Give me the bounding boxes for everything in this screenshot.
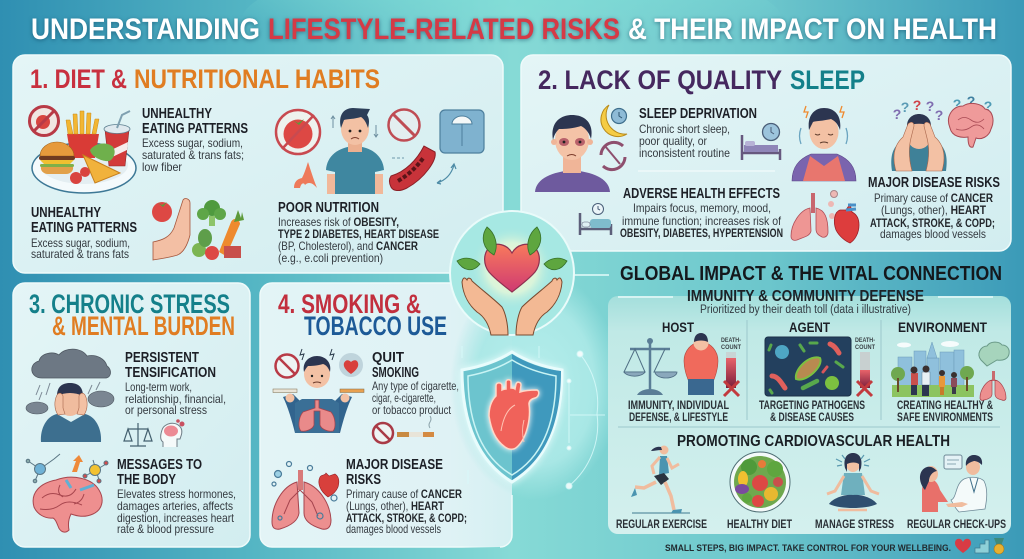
text: unhealthy eating patterns 1: Excess sugar, sodium, [142,136,243,150]
icon: city park [891,341,974,397]
panel: chronic stress and mental burden [13,283,250,547]
icon: person with questions [891,93,992,171]
text: quit smoking: cigar, e-cigarette, [372,391,436,405]
text: major disease risks 4 [346,457,467,536]
icon: crossed apple [276,110,320,154]
icon: person with questions: ? [935,107,943,123]
item: regular exercise [616,446,707,531]
text: poor nutrition: Increases risk of OBESITY, [278,215,399,229]
icon: lungs [980,371,1006,400]
heading: promoting cardiovascular health: PROMOTING CARDIOVASCULAR HEALTH [677,433,950,450]
text: sleep deprivation: poor quality, or [639,134,707,148]
heading: stress [29,289,235,341]
heading: stress: 3. CHRONIC STRESS [29,289,230,319]
icon: hand refusing vegetables [152,199,244,260]
text: major disease risks 4: RISKS [346,472,381,488]
footer tagline: SMALL STEPS, BIG IMPACT. TAKE CONTROL FOR YOUR WELLBEING. [665,543,951,554]
text: adverse health effects: immune function; increases risk of [622,214,782,228]
icon: tired person [326,108,384,194]
footer tagline [665,538,1004,554]
text: major disease risks 2: (Lungs, other), HEART [881,203,987,217]
icon: person under storm cloud [26,349,114,442]
text: poor nutrition [278,200,439,265]
icon: death count gauge agent: COUNT [855,344,875,351]
text: sleep deprivation [639,106,757,160]
text: poor nutrition: (e.g., e.coli prevention) [278,251,383,265]
icon: bed with clock [742,124,780,160]
column: host: HOST [662,319,694,335]
item: healthy diet [727,452,792,531]
icon: person with questions: ? [953,96,961,112]
text: environment caption: CREATING HEALTHY & [897,400,993,412]
text: messages to the body [117,457,236,536]
icon: flame [294,162,317,188]
item: healthy diet: HEALTHY DIET [727,519,792,531]
icon: death count gauge host: COUNT [721,344,741,351]
icon: doctor and patient [920,455,987,512]
icon: death count gauge agent: DEATH- [855,337,875,344]
text: major disease risks 2: damages blood vessels [880,227,986,241]
text: unhealthy eating patterns 2: Excess sugar, sodium, [31,236,130,250]
icon: lungs heart and bubbles [272,462,339,529]
title [31,13,997,46]
text: poor nutrition: (BP, Cholesterol), and CANCER [278,239,418,253]
text: messages to the body: rate & blood pressure [117,522,214,536]
icon: weighing scale [440,110,484,153]
text: unhealthy eating patterns 1 [142,106,248,174]
icon: crossed vessel [388,110,420,140]
icon: drowsy person in hoodie [792,106,856,181]
item: manage stress [815,453,894,531]
icon: person with questions: ? [893,106,901,122]
icon: fast food plate [30,106,136,193]
icon: no smoking [373,416,434,443]
decoration: circuit lines [462,346,605,489]
text: adverse health effects [620,186,783,240]
icon: death count gauge agent [855,337,875,396]
icon: moon and clock [601,105,627,137]
column: environment: ENVIRONMENT [898,319,987,335]
text: host caption: IMMUNITY, INDIVIDUAL [628,400,729,412]
icon: person with questions: ? [926,98,934,114]
icon: salad plate [730,452,790,512]
column: agent: AGENT [789,319,830,335]
icon: brain with lightning [33,455,102,532]
text: major disease risks 4: (Lungs, other), HEART [346,499,445,513]
icon: clogged artery [390,146,435,191]
icon: person with questions: ? [913,97,921,113]
icon: brain [948,103,993,147]
text: environment caption: SAFE ENVIRONMENTS [897,412,993,424]
text: sleep deprivation: SLEEP DEPRIVATION [639,106,757,122]
heading: sleep: SLEEP [790,65,865,95]
text: messages to the body: THE BODY [117,472,176,488]
text: environment caption [897,400,993,424]
icon: head with brain [161,419,184,447]
icon: heart shield [462,352,562,482]
item: regular check-ups [907,455,1006,531]
text: major disease risks 2 [868,175,1000,241]
icon: runner [631,446,690,513]
text: adverse health effects: Impairs focus, memory, mood, [633,201,771,215]
text: agent caption: & DISEASE CAUSES [770,412,854,424]
panel: global impact backdrop [608,296,1011,534]
icon: person with questions: ? [984,98,992,114]
icon: footer steps [975,540,989,553]
heading: sleep: 2. LACK OF QUALITY [538,65,782,95]
heading: smoking: 4. SMOKING & [278,289,421,319]
text: unhealthy eating patterns 1: low fiber [142,160,182,174]
text: major disease risks 2: Primary cause of CANCER [874,191,993,205]
item: manage stress: MANAGE STRESS [815,519,894,531]
text: major disease risks 4: Primary cause of CANCER [346,487,462,501]
heading: smoking [278,289,447,341]
text: poor nutrition: TYPE 2 DIABETES, HEART DISEASE [278,227,439,241]
text: adverse health effects: ADVERSE HEALTH EFFECTS [623,186,780,202]
icon: death count gauge host [721,337,741,396]
text: major disease risks 4: ATTACK, STROKE, & COPD; [346,511,467,525]
text: messages to the body: damages arteries, affects [117,499,233,513]
text: agent caption: TARGETING PATHOGENS [759,400,865,412]
text: persistent tensification: relationship, financial, [125,392,226,406]
panel: lack of quality sleep [521,55,1011,251]
text: unhealthy eating patterns 1: UNHEALTHY [142,106,212,122]
column: host [624,319,741,424]
icon: curved arrow [437,164,456,184]
icon: person with questions: ? [967,93,975,109]
text: immunity heading: IMMUNITY & COMMUNITY DEFENSE [687,288,924,305]
center glow over panel edge [450,270,620,500]
panel: diet and nutritional habits [13,55,503,273]
heading: diet: NUTRITIONAL HABITS [134,64,380,94]
text: agent caption [759,400,865,424]
text: persistent tensification: Long-term work, [125,380,192,394]
text: persistent tensification [125,350,226,417]
text: persistent tensification: PERSISTENT [125,350,199,366]
icon: footer heart [955,539,971,553]
title: UNDERSTANDING [31,13,260,46]
text: quit smoking: QUIT [372,350,404,366]
text: unhealthy eating patterns 1: saturated & trans fats; [142,148,244,162]
heading: smoking: TOBACCO USE [304,311,447,341]
text: host caption: DEFENSE, & LIFESTYLE [629,412,728,424]
icon: person holding cigarettes [273,349,364,433]
icon: smog cloud [979,342,1009,366]
heading: diet [30,64,380,94]
text: major disease risks 4: damages blood vessels [346,522,441,536]
text: persistent tensification: TENSIFICATION [125,365,216,381]
text: major disease risks 4: MAJOR DISEASE [346,457,443,473]
icon: person with questions: ? [901,99,909,115]
text: quit smoking [372,350,459,417]
text: sleep deprivation: inconsistent routine [639,146,730,160]
text: unhealthy eating patterns 2: UNHEALTHY [31,205,101,221]
text: unhealthy eating patterns 2: saturated & trans fats [31,247,129,261]
icon: disrupted cycle [601,142,625,170]
text: adverse health effects: OBESITY, DIABETES, HYPERTENSION [620,226,783,240]
icon: heart in hands [450,211,609,335]
icon: scales [124,423,152,446]
text: messages to the body: digestion, increases heart [117,511,235,525]
text: unhealthy eating patterns 1: EATING PATTERNS [142,121,248,137]
icon: death count gauge host: DEATH- [721,337,741,344]
text: messages to the body: MESSAGES TO [117,457,202,473]
icon: meditating person [827,453,879,510]
icon: molecules [26,454,108,483]
item: regular exercise: REGULAR EXERCISE [616,519,707,531]
text: poor nutrition: POOR NUTRITION [278,200,379,216]
icon: sleepy person [535,115,610,192]
column: agent [759,319,875,424]
text: unhealthy eating patterns 2 [31,205,137,261]
text: unhealthy eating patterns 2: EATING PATTERNS [31,220,137,236]
heading: stress: & MENTAL BURDEN [52,311,235,341]
text: quit smoking: or tobacco product [372,403,452,417]
panel: smoking and tobacco use [260,270,620,547]
text: sleep deprivation: Chronic short sleep, [639,122,730,136]
text: host caption [628,400,729,424]
icon: overweight person [684,333,718,395]
text: messages to the body: Elevates stress hormones, [117,487,236,501]
heading: diet: 1. DIET & [30,64,127,94]
icon: small bed [580,204,611,235]
text: persistent tensification: or personal stress [125,403,207,417]
dividers [618,320,1000,427]
title: LIFESTYLE-RELATED RISKS [268,13,620,46]
icon: pathogens panel [765,337,851,396]
column: environment [891,319,1009,424]
text: subtitle: Prioritized by their death toll (data i illustrative) [700,304,911,316]
text: quit smoking: Any type of cigarette, [372,379,459,393]
icon: footer medal [994,538,1004,554]
text: quit smoking: SMOKING [372,365,419,381]
icon: balance scales [624,338,677,395]
icon: lungs and heart [791,190,859,243]
